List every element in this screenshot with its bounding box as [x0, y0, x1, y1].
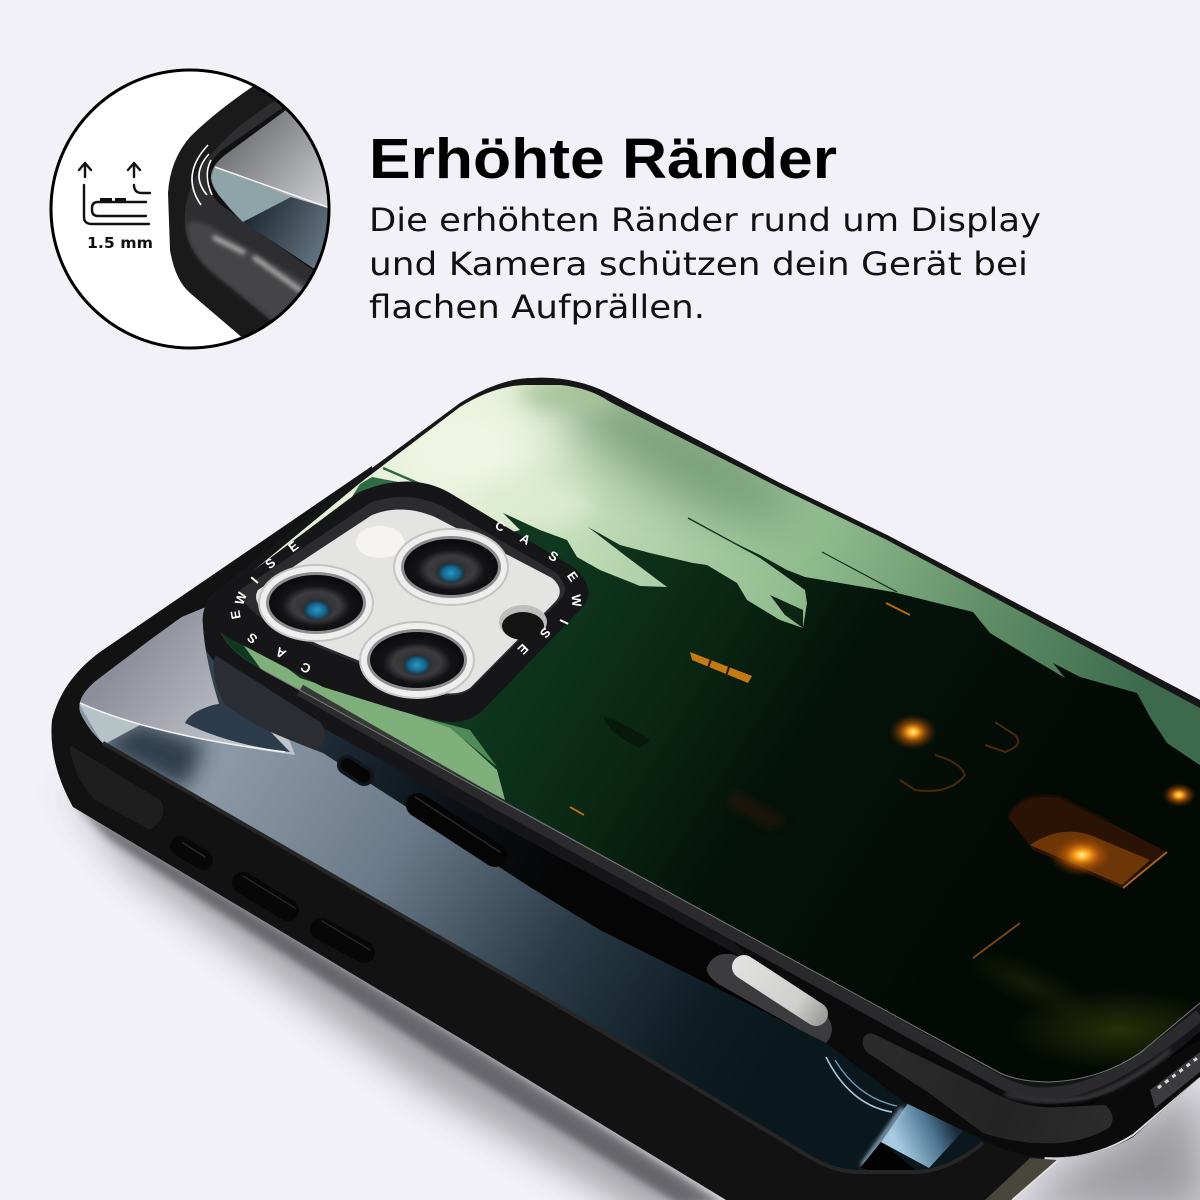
lens two [394, 529, 508, 605]
front phone case [200, 360, 1200, 1158]
camera ring lettering: A [517, 530, 534, 548]
camera ring lettering: S [546, 548, 561, 565]
camera ring lettering: E [564, 569, 582, 585]
back phone screen [79, 607, 985, 1170]
outer edge reflection [1045, 1078, 1200, 1158]
lens one [259, 565, 373, 641]
inset circle: raised edge detail [51, 60, 340, 348]
description text: flachen Aufprällen. [369, 288, 705, 326]
camera ring lettering: I [557, 617, 572, 627]
camera ring lettering: E [515, 641, 532, 658]
camera ring lettering: C [297, 659, 314, 677]
arched windows [604, 718, 790, 830]
description text [369, 201, 1041, 326]
window ledge lines [973, 852, 1167, 958]
castle silhouette [200, 500, 1200, 1100]
camera raised ring [209, 482, 589, 722]
inset screen [210, 110, 328, 268]
back phone inner bezel highlight [103, 743, 983, 1172]
camera ring lettering: S [537, 625, 554, 641]
flash [356, 526, 404, 558]
back phone grip patch [70, 745, 163, 830]
inset phone corner photo [168, 86, 328, 337]
front case raised rim [218, 385, 1200, 1082]
camera ring lettering [227, 517, 585, 677]
camera ring lettering: C [492, 517, 509, 535]
microphone hole [499, 605, 547, 640]
back phone metallic edge [985, 1158, 1058, 1200]
phone artwork [200, 360, 1200, 1100]
arch gate [1008, 796, 1167, 888]
description text: und Kamera schützen dein Gerät bei [369, 245, 1028, 283]
sky clouds [380, 385, 805, 542]
camera module [209, 482, 589, 722]
height label: 1.5 mm [87, 234, 153, 252]
camera ring lettering: S [244, 630, 260, 647]
front case grip patch left [214, 655, 325, 752]
front power button [415, 797, 500, 855]
lens three [360, 622, 474, 698]
screen lower edge highlight [300, 690, 1200, 1094]
back screen light streaks [881, 1103, 964, 1168]
camera ring lettering: S [262, 555, 279, 572]
back phone rim [51, 466, 1045, 1200]
back phone side buttons [180, 843, 370, 952]
height diagram icon [79, 163, 150, 224]
corner grille highlight [1150, 1052, 1200, 1108]
glowing lamps [889, 714, 1196, 877]
ornate gate trims [900, 722, 1018, 791]
front speaker slot [347, 765, 364, 776]
small tower spire [770, 595, 803, 628]
charging port [707, 954, 832, 1043]
screen hairline [263, 670, 1200, 1082]
camera inner wall [240, 497, 565, 696]
inset motion arcs [192, 145, 212, 205]
camera ring lettering: E [285, 538, 302, 555]
front case grip patch right [863, 1034, 1113, 1143]
heading: Erhöhte Ränder [369, 127, 837, 191]
front case body [203, 378, 1200, 1158]
camera ring lettering: E [227, 609, 244, 620]
olive foreground glow [994, 965, 1189, 1061]
back phone case [51, 466, 1060, 1200]
camera ring lettering: W [232, 589, 250, 607]
camera ring lettering: W [568, 594, 585, 608]
camera plate [256, 509, 560, 694]
lower left light brush [244, 646, 505, 800]
top left green strip [352, 477, 398, 497]
spire lines [383, 468, 897, 592]
camera ring lettering: A [272, 644, 289, 662]
phone drop shadows [60, 780, 1200, 1200]
small orange glints [570, 603, 910, 815]
description text: Die erhöhten Ränder rund um Display [369, 201, 1041, 239]
camera ring lettering: I [248, 574, 261, 586]
lit upper window [690, 652, 752, 683]
